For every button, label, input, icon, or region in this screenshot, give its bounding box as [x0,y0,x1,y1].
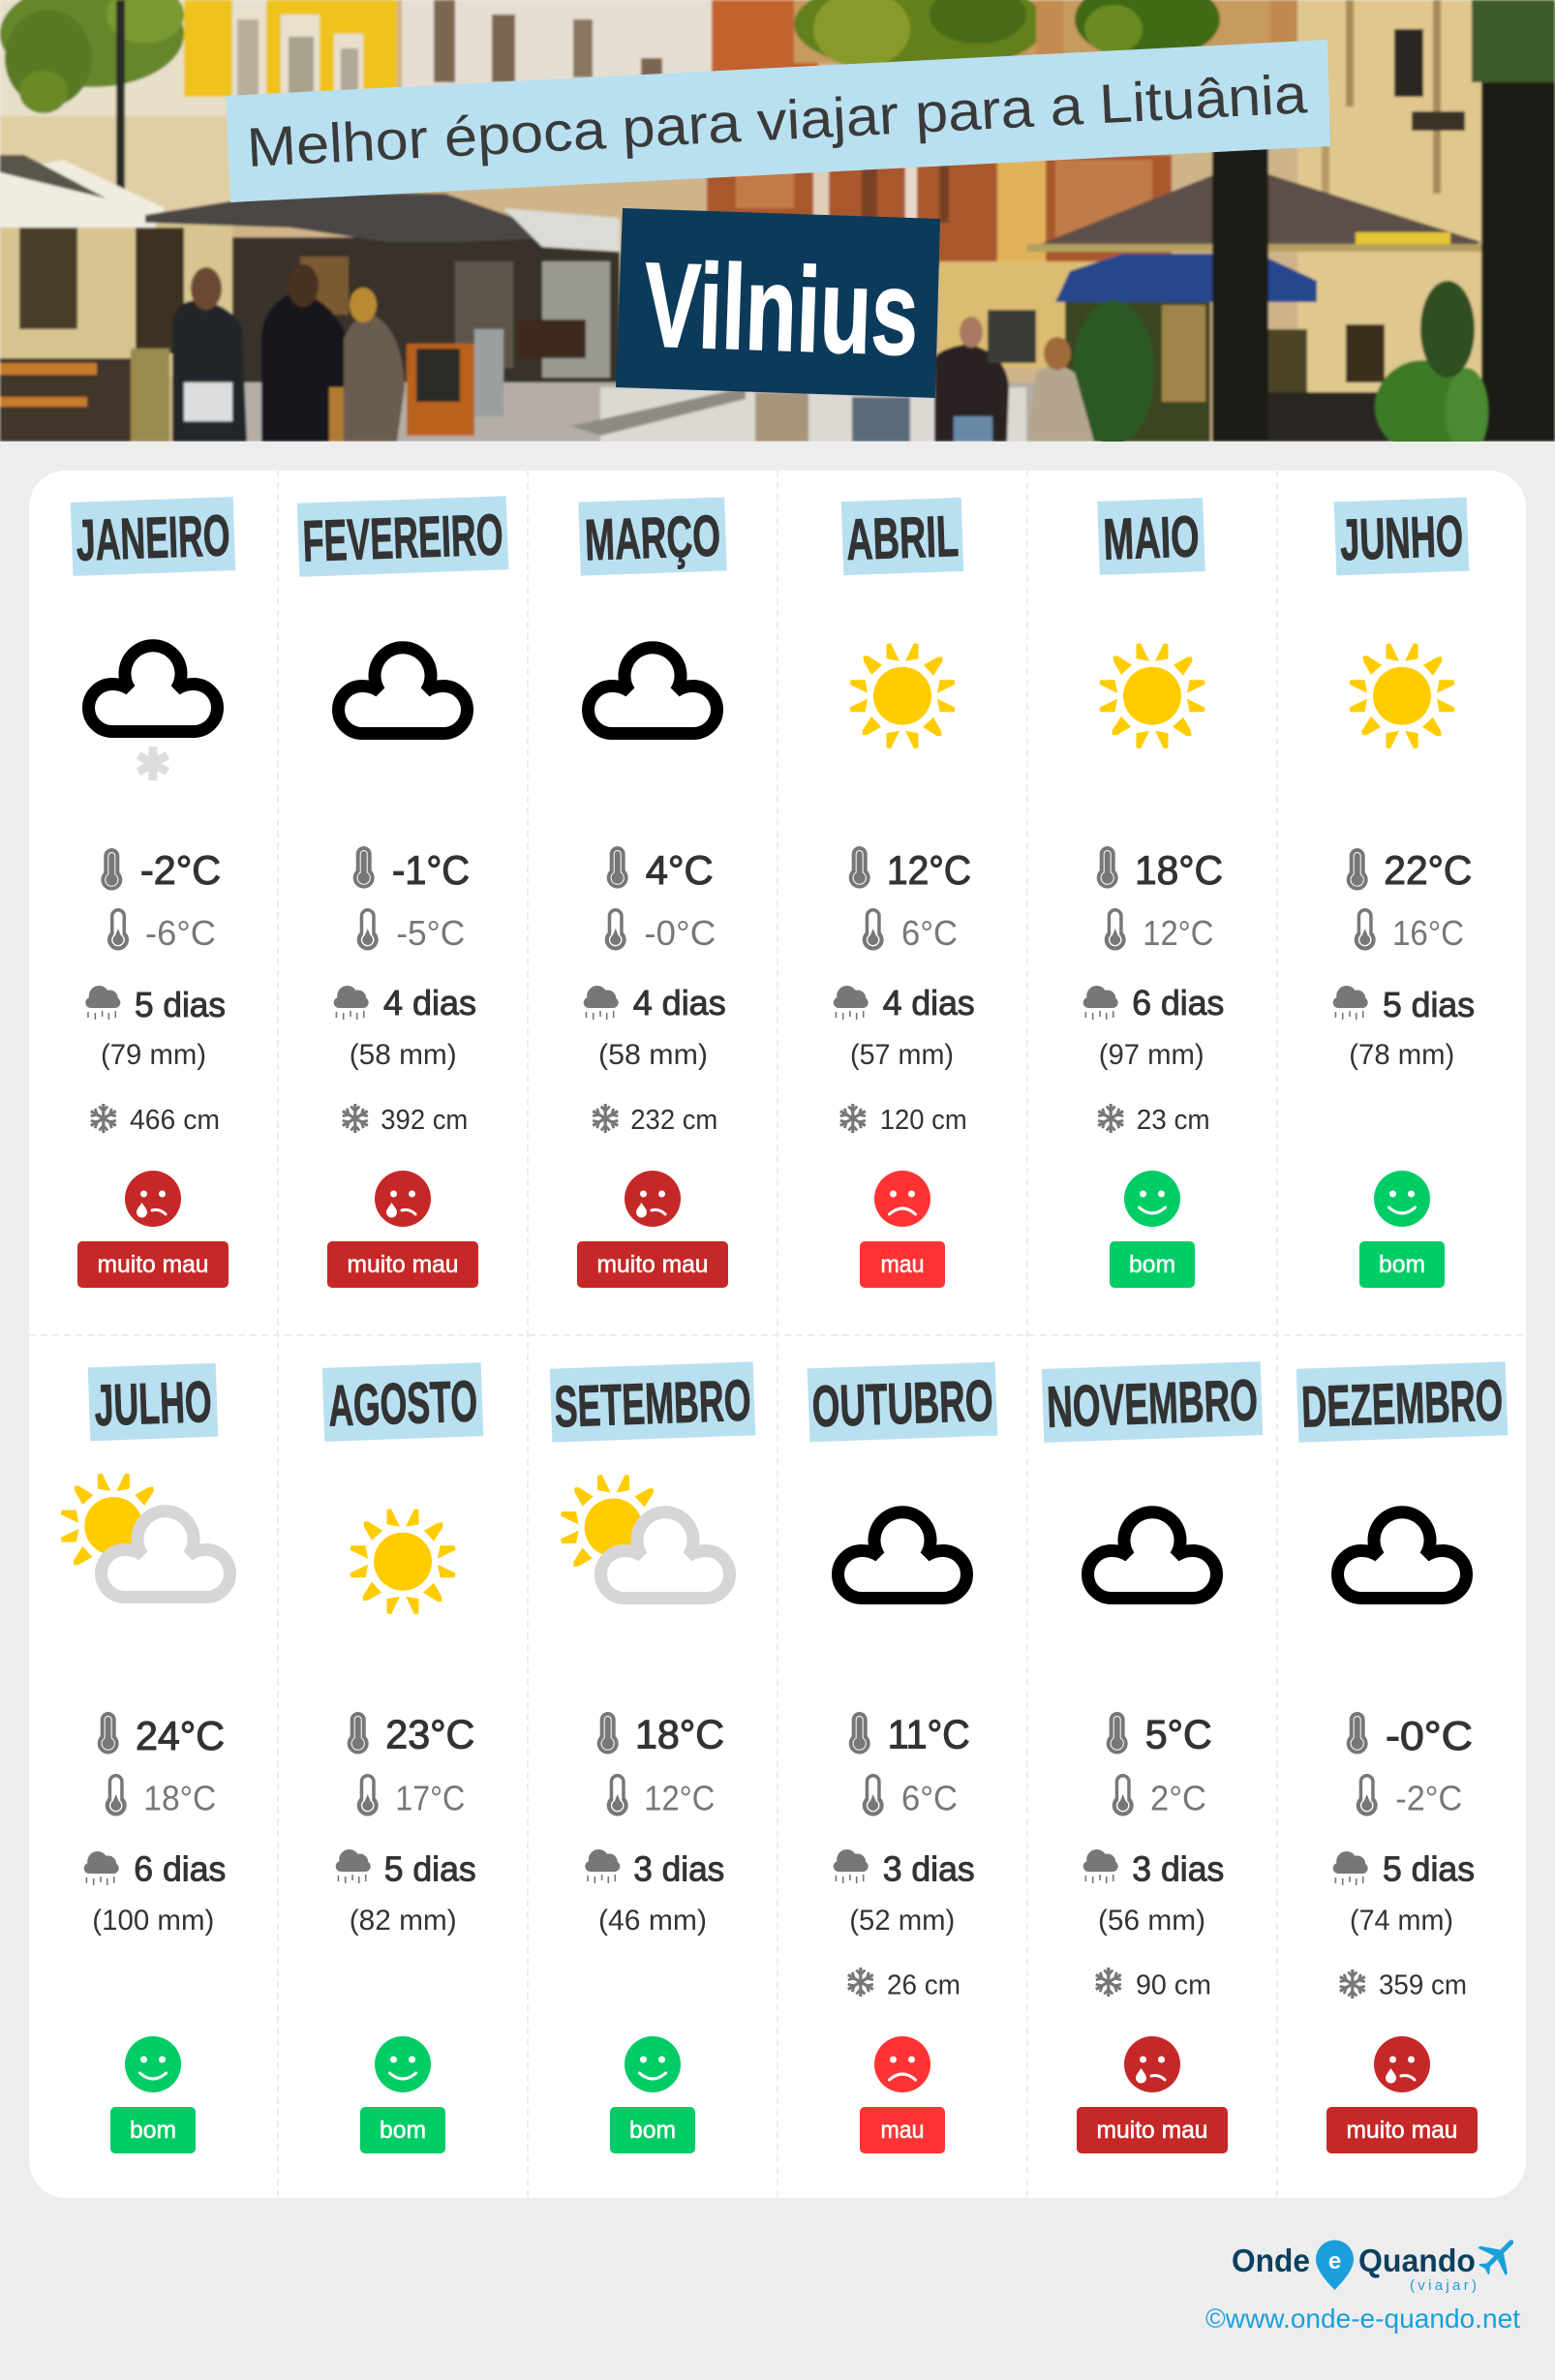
logo: Onde e Quando viajar: Onde [1232,2243,1310,2278]
rating [860,2036,945,2153]
icon: sun behind cloud [61,1474,229,1598]
rating: bom [380,2117,426,2144]
month label: JULHO [93,1369,213,1438]
low temperature [605,908,716,953]
month label: NOVEMBRO [1046,1367,1259,1440]
low temperature [1113,1774,1206,1818]
low temperature [1357,1774,1462,1818]
high temperature [849,1712,970,1756]
snowfall: 90 cm [1136,1970,1211,2001]
rain days: 6 dias [1132,983,1224,1022]
icon: cloud [1088,1512,1216,1598]
rainfall: (57 mm) [850,1039,954,1071]
low temperature: 6°C [901,913,958,953]
high temperature [98,1712,225,1758]
month label: ABRIL [845,503,960,572]
snowfall: 466 cm [130,1105,220,1136]
rain days [1083,1848,1224,1888]
low temperature: -0°C [644,913,716,953]
rain days: 5 dias [1383,985,1475,1024]
month label: MARÇO [584,503,721,572]
icon: sun [1350,643,1454,748]
month label [322,1362,483,1442]
icon: cloud [589,648,717,734]
rainfall: (46 mm) [598,1905,707,1937]
month label: OUTUBRO [810,1368,994,1439]
rain days: 5 dias [384,1848,476,1888]
white months card [29,471,1526,2198]
rain days: 4 dias [883,983,975,1022]
rain days: 5 dias [1383,1848,1475,1888]
rain days: 3 dias [633,1848,724,1888]
rain days: 3 dias [1132,1848,1224,1888]
low temperature [357,1774,465,1818]
rating [360,2036,445,2153]
rain days [334,983,476,1022]
icon: airplane [1470,2227,1527,2283]
month label [1042,1361,1263,1443]
column: junho [1333,498,1475,1288]
snowfall: 232 cm [630,1105,717,1136]
high temperature [353,846,470,893]
low temperature: 6°C [901,1779,958,1818]
snowfall: 392 cm [381,1105,468,1136]
snowfall [846,1968,960,2001]
low temperature [863,908,958,953]
website credit: ©www.onde-e-quando.net [1205,2304,1520,2334]
low temperature: -2°C [1395,1779,1462,1818]
month label [550,1361,755,1443]
high temperature: 18°C [635,1712,724,1756]
month label [841,498,963,575]
high temperature [849,846,971,893]
icon: map pin [1316,2241,1354,2290]
rainfall: (58 mm) [350,1039,457,1071]
rainfall: (58 mm) [598,1039,708,1071]
icon: cloud [838,1512,966,1598]
snowfall: 23 cm [1137,1105,1210,1136]
rating: mau [881,2117,924,2144]
rating: muito mau [1346,2117,1458,2144]
rating: muito mau [596,1251,709,1278]
rating [610,2036,695,2153]
snowfall [341,1104,468,1136]
high temperature [101,847,221,893]
low temperature: 18°C [143,1779,216,1818]
month label: AGOSTO [327,1368,478,1439]
low temperature [107,908,216,953]
high temperature [1347,847,1472,893]
month label: SETEMBRO [553,1367,752,1440]
month label [578,497,727,576]
month label [1097,498,1205,575]
rating: bom [1129,1251,1175,1278]
month label: JUNHO [1339,503,1464,572]
rain days: 4 dias [633,983,726,1022]
snowfall [1338,1969,1467,2001]
rainfall: (82 mm) [350,1905,457,1937]
icon: sun [1100,643,1204,748]
rating [577,1171,728,1288]
rating [1077,2036,1228,2153]
snowfall [1094,1968,1211,2001]
icon: sun [351,1509,455,1614]
high temperature: -1°C [392,847,470,893]
rating [1326,2036,1478,2153]
rating: mau [881,1251,924,1278]
high temperature: 22°C [1384,847,1472,893]
month label: MAIO [1102,503,1201,572]
high temperature: 4°C [646,847,714,893]
rain days: 6 dias [134,1848,226,1888]
rating: bom [1379,1251,1425,1278]
high temperature: 24°C [136,1713,225,1758]
high temperature: 12°C [887,847,971,893]
month label [71,497,235,576]
rain days [84,1848,226,1888]
high temperature: 18°C [1135,847,1223,893]
snowfall: 26 cm [887,1970,960,2001]
snowfall: 120 cm [880,1105,967,1136]
column: dezembro [1296,1361,1508,2153]
month label: JANEIRO [75,503,231,573]
snowfall [1096,1104,1210,1136]
snowfall: 359 cm [1379,1970,1467,2001]
snowfall [89,1104,220,1136]
high temperature [597,1712,724,1756]
rainfall: (74 mm) [1350,1905,1453,1937]
rating [110,2036,196,2153]
month label [88,1363,218,1441]
low temperature: 2°C [1150,1779,1206,1818]
column: agosto [322,1362,483,2153]
column: fevereiro [297,496,508,1288]
rainfall: (56 mm) [1098,1905,1205,1937]
snowfall [591,1104,717,1136]
low temperature: -5°C [396,913,465,953]
low temperature [1355,908,1464,953]
column: novembro [1042,1361,1263,2153]
high temperature [607,846,714,893]
low temperature: 12°C [1143,913,1213,953]
rating: muito mau [347,1251,459,1278]
rain days [1083,983,1224,1022]
low temperature: 12°C [644,1779,715,1818]
high temperature: -0°C [1386,1713,1473,1758]
rain days [584,983,726,1022]
rain days [585,1848,724,1888]
high temperature [1107,1712,1212,1756]
rainfall: (52 mm) [849,1905,955,1937]
rain days [834,1848,975,1888]
rainfall: (100 mm) [92,1905,214,1937]
month label: FEVEREIRO [301,502,504,574]
high temperature [348,1712,474,1756]
column: janeiro [71,497,235,1288]
rain days: 5 dias [135,985,226,1024]
high temperature [1347,1712,1473,1758]
rain days [85,985,226,1024]
month label [297,496,508,577]
icon: sun [850,643,955,748]
rain days [1333,985,1475,1024]
column: maio [1083,498,1224,1288]
rain days: 3 dias [883,1848,975,1888]
rating: muito mau [1096,2117,1208,2144]
icon: cloud [339,648,467,734]
column: outubro [808,1362,997,2153]
rain days [1333,1848,1475,1888]
low temperature [357,908,465,953]
rainfall: (78 mm) [1349,1039,1454,1071]
high temperature: -2°C [140,847,221,893]
low temperature [106,1774,216,1818]
rain days [336,1848,476,1888]
rating [1110,1171,1195,1288]
low temperature: -6°C [145,913,216,953]
high temperature: 23°C [385,1712,474,1756]
rain days [834,983,975,1022]
column: julho [61,1363,229,2153]
title banner: Melhor época para viajar para a Lituânia [245,63,1309,179]
low temperature [607,1774,715,1818]
low temperature [863,1774,958,1818]
icon: cloud with snow [89,646,217,780]
column: setembro [550,1361,755,2153]
logo: Onde e Quando viajar: Quando [1358,2243,1476,2278]
rating: bom [130,2117,176,2144]
logo: Onde e Quando viajar: (viajar) [1410,2277,1477,2294]
low temperature: 17°C [395,1779,465,1818]
city name panel [616,208,940,398]
low temperature: 16°C [1392,913,1464,953]
high temperature: 5°C [1145,1712,1212,1756]
logo: Onde e Quando viajar: e [1328,2248,1341,2274]
snowfall [838,1104,967,1136]
column: abril [834,498,975,1288]
high temperature: 11°C [888,1712,970,1756]
title banner [226,40,1330,202]
city name panel: Vilnius [642,238,921,381]
low temperature [1105,908,1213,953]
rating [327,1171,478,1288]
month label [808,1362,997,1442]
month label [1334,498,1469,575]
rating [77,1171,229,1288]
rainfall: (79 mm) [101,1039,206,1071]
rating [1359,1171,1445,1288]
column: março [577,497,728,1288]
logo: Onde e Quando viajar [1232,2227,1527,2294]
rating [860,1171,945,1288]
rainfall: (97 mm) [1099,1039,1204,1071]
icon: cloud [1338,1512,1466,1598]
hero photo: Vilnius street [0,0,1555,455]
rating: bom [629,2117,676,2144]
rating: muito mau [97,1251,209,1278]
rain days: 4 dias [383,983,476,1022]
high temperature [1097,846,1223,893]
icon: sun behind cloud [561,1475,729,1598]
